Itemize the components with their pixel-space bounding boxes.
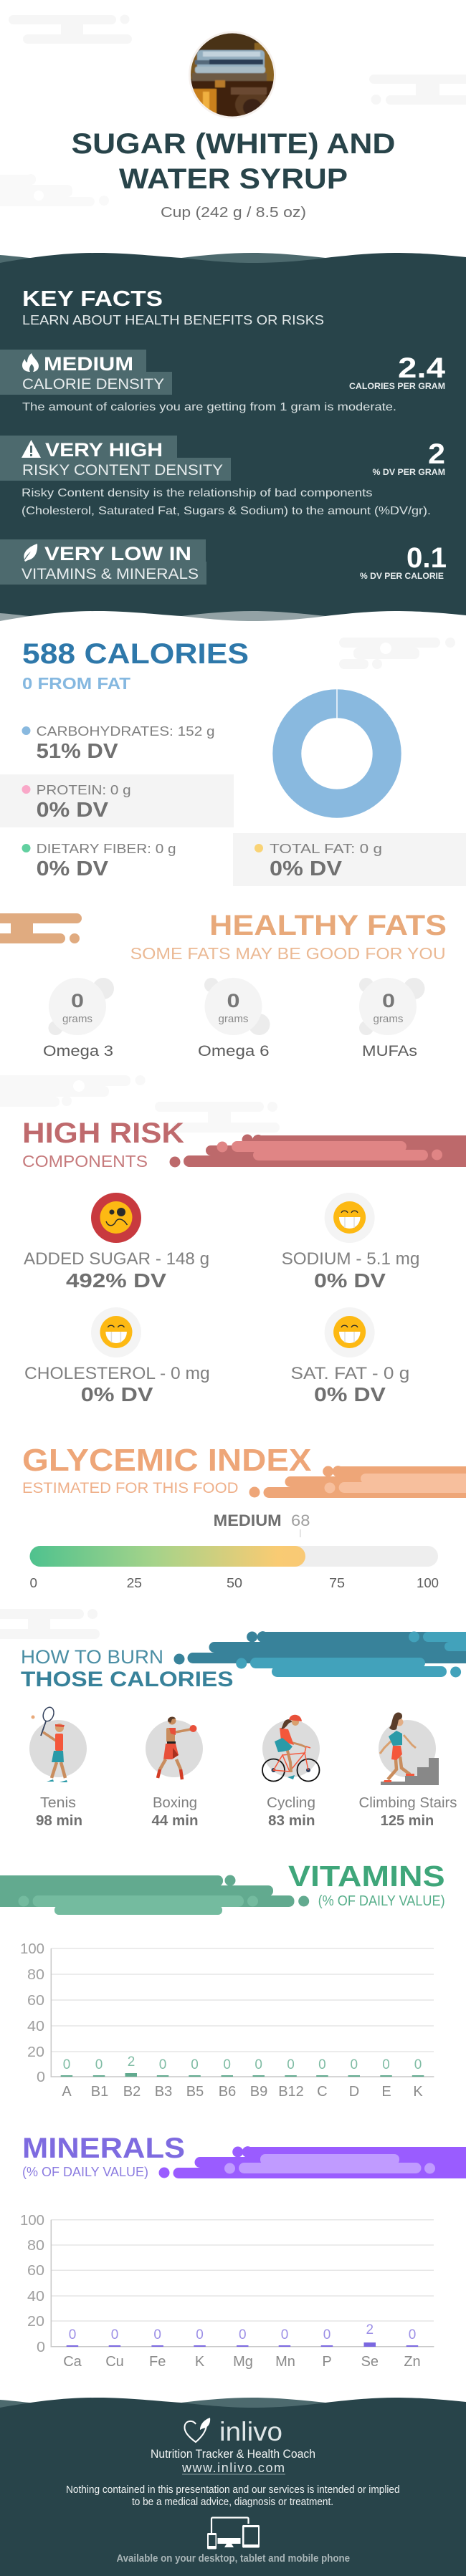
- cloud: purple: [159, 2146, 466, 2178]
- legend: total fat: TOTAL FAT: 0 g: [270, 841, 382, 856]
- bar chart: vitamins: 0: [351, 2057, 358, 2072]
- bar chart: minerals: Se: [361, 2354, 379, 2370]
- panel: how to burn calories: [21, 1631, 466, 1829]
- heading: those calories: THOSE CALORIES: [21, 1668, 234, 1691]
- risk item: added sugar: 492% DV: [66, 1269, 166, 1292]
- bar chart: vitamins: 2: [128, 2054, 135, 2070]
- activity: climbing stairs: Climbing Stairs: [358, 1794, 457, 1811]
- heading: how to burn: HOW TO BURN: [21, 1646, 163, 1668]
- cloud: orange: [249, 1466, 466, 1498]
- logo: inlivo: [184, 2417, 282, 2446]
- risk item: added sugar: ADDED SUGAR - 148 g: [24, 1249, 209, 1269]
- legend: dietary fiber: 0% DV: [37, 857, 109, 880]
- bar chart: minerals: Mg: [233, 2354, 253, 2370]
- bar chart: vitamins: B6: [219, 2084, 236, 2100]
- food photo: syrup jar: [189, 32, 276, 119]
- activity: tennis: 98 min: [36, 1813, 82, 1829]
- website link: www.inlivo.com: [181, 2461, 285, 2475]
- bar chart: minerals: 60: [27, 2262, 44, 2279]
- bar chart: minerals: 0: [111, 2327, 118, 2342]
- stat: mufas: MUFAs: [362, 1042, 417, 1059]
- fact: calorie density: MEDIUM: [44, 353, 133, 375]
- activity: cycling: [262, 1715, 320, 1829]
- risk item: sodium: 0% DV: [314, 1269, 386, 1292]
- bar chart: minerals: 0: [409, 2327, 416, 2342]
- panel: calories: [0, 638, 466, 886]
- availability note: Available on your desktop, tablet and mobile phone: [116, 2552, 350, 2565]
- fact: risky content density: 2: [428, 438, 445, 470]
- gauge scale: 75: [329, 1575, 345, 1590]
- bar chart: minerals: 0: [239, 2327, 247, 2342]
- stat: omega 3: Omega 3: [43, 1042, 113, 1059]
- logo: inlivo: inlivo: [219, 2417, 282, 2446]
- risk item: cholesterol: 0% DV: [81, 1383, 153, 1405]
- bar chart: vitamins: B1: [91, 2084, 108, 2100]
- bar chart: minerals: Cu: [105, 2354, 124, 2370]
- risk item: cholesterol: CHOLESTEROL - 0 mg: [24, 1364, 210, 1383]
- fact: risky content density: VERY HIGH: [45, 439, 163, 461]
- fact: vitamins and minerals: VITAMINS & MINERALS: [22, 566, 199, 582]
- bar chart: minerals: 100: [20, 2212, 44, 2229]
- cloud: teal: [173, 1631, 466, 1678]
- legend: total fat: 0% DV: [270, 857, 343, 880]
- title: WATER SYRUP: [119, 163, 348, 195]
- activity: cycling: Cycling: [267, 1794, 315, 1811]
- gauge bar: [30, 1546, 438, 1567]
- panel: glycemic index: [22, 1443, 466, 1590]
- bar chart: minerals: Ca: [63, 2354, 82, 2370]
- gauge value: 68: [291, 1512, 310, 1529]
- legend: dietary fiber: [22, 841, 176, 880]
- risk item: saturated fat: 0% DV: [314, 1383, 386, 1405]
- bar chart: vitamins: B9: [250, 2084, 267, 2100]
- background cloud: burn: [0, 1609, 100, 1639]
- fact: vitamins and minerals: VERY LOW IN: [44, 543, 191, 564]
- bar chart: vitamins: 100: [20, 1941, 44, 1957]
- disclaimer: to be a medical advice, diagnosis or treatment.: [132, 2496, 333, 2508]
- bar chart: vitamins: 0: [255, 2057, 262, 2072]
- risk item: sodium: SODIUM - 5.1 mg: [282, 1249, 419, 1269]
- background cloud: header lower left: [0, 174, 109, 206]
- donut chart: [287, 688, 387, 804]
- stat: mufas: 0: [382, 990, 395, 1011]
- bar chart: vitamins: 20: [27, 2044, 44, 2060]
- title: [72, 128, 396, 195]
- legend: total fat: [233, 833, 466, 886]
- stat: mufas: [359, 978, 424, 1059]
- background cloud: header right: [369, 75, 466, 105]
- bar chart: vitamins: A: [62, 2084, 72, 2100]
- heading: minerals: MINERALS: [22, 2133, 185, 2164]
- subheading: components: COMPONENTS: [22, 1152, 148, 1171]
- icon: devices: [207, 2517, 260, 2549]
- bar chart: minerals: K: [195, 2354, 205, 2370]
- legend: carbohydrates: 51% DV: [37, 740, 118, 763]
- activity: boxing: [146, 1716, 203, 1829]
- fact: calorie density: 2.4: [398, 352, 446, 384]
- risk item: saturated fat: SAT. FAT - 0 g: [291, 1364, 409, 1383]
- panel: healthy fats: [0, 910, 447, 1059]
- background cloud: behind high risk: [155, 1102, 280, 1133]
- heading: healthy fats: HEALTHY FATS: [209, 910, 447, 941]
- fact: calorie density: CALORIE DENSITY: [22, 376, 164, 393]
- background cloud: between fats and risk: [0, 1075, 146, 1107]
- stat: omega 3: 0: [71, 990, 84, 1011]
- bar chart: vitamins: D: [349, 2084, 359, 2100]
- fact: risky content density: % DV PER GRAM: [373, 468, 445, 477]
- activity: boxing: Boxing: [153, 1794, 197, 1811]
- activity: tennis: [29, 1706, 87, 1829]
- risk item: saturated fat: [291, 1307, 409, 1405]
- bar chart: vitamins: 0: [159, 2057, 166, 2072]
- activity: boxing: 44 min: [152, 1813, 198, 1829]
- bar chart: vitamins: B3: [155, 2084, 172, 2100]
- bar chart: vitamins: 40: [27, 2018, 44, 2034]
- risk item: cholesterol: [24, 1307, 210, 1405]
- activity: climbing stairs: [358, 1713, 457, 1829]
- gauge scale: 25: [127, 1575, 142, 1590]
- bar chart: minerals: 40: [27, 2288, 44, 2305]
- activity: climbing stairs: 125 min: [381, 1813, 434, 1829]
- legend: protein: PROTEIN: 0 g: [37, 782, 131, 797]
- bar chart: vitamins: 0: [191, 2057, 199, 2072]
- bar chart: vitamins: 0: [95, 2057, 103, 2072]
- panel: vitamins: [0, 1860, 445, 2100]
- activity: tennis: Tenis: [40, 1794, 76, 1811]
- serving size: Cup (242 g / 8.5 oz): [161, 205, 306, 221]
- subheading: from fat: 0 FROM FAT: [22, 674, 130, 693]
- fact: risky content density: [0, 436, 445, 517]
- bar chart: minerals: Zn: [404, 2354, 421, 2370]
- gauge scale: 50: [227, 1575, 242, 1590]
- subheading: daily value: (% OF DAILY VALUE): [22, 2165, 148, 2179]
- bar chart: minerals: 0: [153, 2327, 161, 2342]
- bar chart: vitamins: 0: [382, 2057, 390, 2072]
- bar chart: minerals: 0: [196, 2327, 204, 2342]
- heading: key facts: KEY FACTS: [22, 286, 163, 311]
- bar chart: vitamins: E: [381, 2084, 391, 2100]
- legend: protein: 0% DV: [37, 799, 109, 822]
- stat: omega 6: [198, 978, 270, 1059]
- bar chart: vitamins: C: [317, 2084, 328, 2100]
- stat: omega 6: 0: [227, 990, 239, 1011]
- bar chart: vitamins: 0: [287, 2057, 295, 2072]
- stat: mufas: grams: [373, 1013, 403, 1025]
- panel: minerals: [20, 2133, 466, 2370]
- tagline: Nutrition Tracker & Health Coach: [151, 2447, 315, 2461]
- bar chart: vitamins: 0: [223, 2057, 231, 2072]
- stat: omega 6: Omega 6: [198, 1042, 270, 1059]
- cloud: orange: [0, 913, 82, 943]
- legend: carbohydrates: [22, 724, 215, 763]
- risk item: sodium: [282, 1193, 419, 1292]
- bar chart: vitamins: B2: [123, 2084, 141, 2100]
- subheading: healthy fats: SOME FATS MAY BE GOOD FOR YOU: [130, 944, 446, 963]
- cloud: red: [169, 1135, 466, 1168]
- gauge scale: 100: [417, 1575, 439, 1590]
- fact: calorie density: CALORIES PER GRAM: [349, 383, 445, 391]
- gauge value: [214, 1512, 310, 1537]
- cloud: green: [0, 1875, 309, 1915]
- fact: calorie density: [0, 350, 446, 413]
- disclaimer: [66, 2484, 400, 2508]
- legend: carbohydrates: CARBOHYDRATES: 152 g: [37, 724, 215, 739]
- bar chart: minerals: Mn: [275, 2354, 295, 2370]
- bar chart: minerals: 0: [69, 2327, 76, 2342]
- gauge scale: [30, 1575, 439, 1590]
- disclaimer: Nothing contained in this presentation and our services is intended or implied: [66, 2484, 400, 2496]
- panel: key facts: [0, 253, 466, 634]
- risk item: added sugar: [24, 1193, 209, 1292]
- gauge scale: 0: [30, 1575, 37, 1590]
- fact: risky content density: (Cholesterol, Saturated Fat, Sugars & Sodium) to the amount (%DV/gr).: [22, 505, 431, 517]
- bar chart: vitamins: 0: [414, 2057, 422, 2072]
- bar chart: minerals: 0: [323, 2327, 331, 2342]
- bar chart: vitamins: 60: [27, 1992, 44, 2009]
- bar chart: vitamins: [20, 1941, 434, 2100]
- bar chart: vitamins: 0: [318, 2057, 326, 2072]
- bar chart: minerals: P: [322, 2354, 332, 2370]
- heading: high risk: HIGH RISK: [22, 1118, 184, 1149]
- icon: flame: [22, 353, 39, 372]
- background cloud: header left: [9, 14, 132, 44]
- stat: omega 6: grams: [218, 1013, 248, 1025]
- bar chart: vitamins: B5: [186, 2084, 204, 2100]
- bar chart: vitamins: 80: [27, 1966, 44, 1983]
- heading: calories: 588 CALORIES: [22, 638, 249, 670]
- subheading: key facts: LEARN ABOUT HEALTH BENEFITS OR RISKS: [22, 313, 324, 327]
- bar chart: vitamins: 0: [63, 2057, 70, 2072]
- stat: omega 3: grams: [62, 1013, 92, 1025]
- bar chart: minerals: 0: [37, 2339, 45, 2355]
- subheading: daily value: (% OF DAILY VALUE): [318, 1893, 445, 1909]
- icon: warning triangle: [22, 440, 41, 458]
- fact: vitamins and minerals: % DV PER CALORIE: [360, 572, 444, 581]
- bar chart: vitamins: K: [413, 2084, 423, 2100]
- bar chart: minerals: Fe: [149, 2354, 166, 2370]
- panel: footer: [0, 2398, 466, 2576]
- bar chart: minerals: 0: [281, 2327, 288, 2342]
- fact: risky content density: Risky Content density is the relationship of bad components: [22, 487, 373, 499]
- bar chart: minerals: 80: [27, 2237, 44, 2254]
- fact: vitamins and minerals: [0, 539, 447, 585]
- bar chart: minerals: 2: [366, 2322, 374, 2337]
- bar chart: vitamins: 0: [37, 2069, 45, 2085]
- stat: omega 3: [43, 978, 114, 1059]
- legend: protein: [0, 774, 234, 827]
- background cloud: calories: [339, 638, 455, 669]
- icon: leaf: [24, 544, 37, 562]
- activity: cycling: 83 min: [268, 1813, 315, 1829]
- subheading: estimated: ESTIMATED FOR THIS FOOD: [22, 1479, 238, 1496]
- bar chart: minerals: [20, 2212, 434, 2370]
- fact: vitamins and minerals: 0.1: [406, 542, 447, 574]
- panel: high risk components: [22, 1118, 466, 1405]
- gauge value: MEDIUM: [214, 1512, 282, 1529]
- title: SUGAR (WHITE) AND: [72, 128, 396, 160]
- fact: calorie density: The amount of calories you are getting from 1 gram is moderate.: [22, 401, 396, 413]
- bar chart: vitamins: B12: [278, 2084, 304, 2100]
- bar chart: minerals: 20: [27, 2313, 44, 2330]
- heading: vitamins: VITAMINS: [288, 1860, 445, 1893]
- legend: dietary fiber: DIETARY FIBER: 0 g: [37, 841, 176, 856]
- heading: glycemic index: GLYCEMIC INDEX: [22, 1443, 312, 1478]
- fact: risky content density: RISKY CONTENT DENSITY: [22, 462, 223, 479]
